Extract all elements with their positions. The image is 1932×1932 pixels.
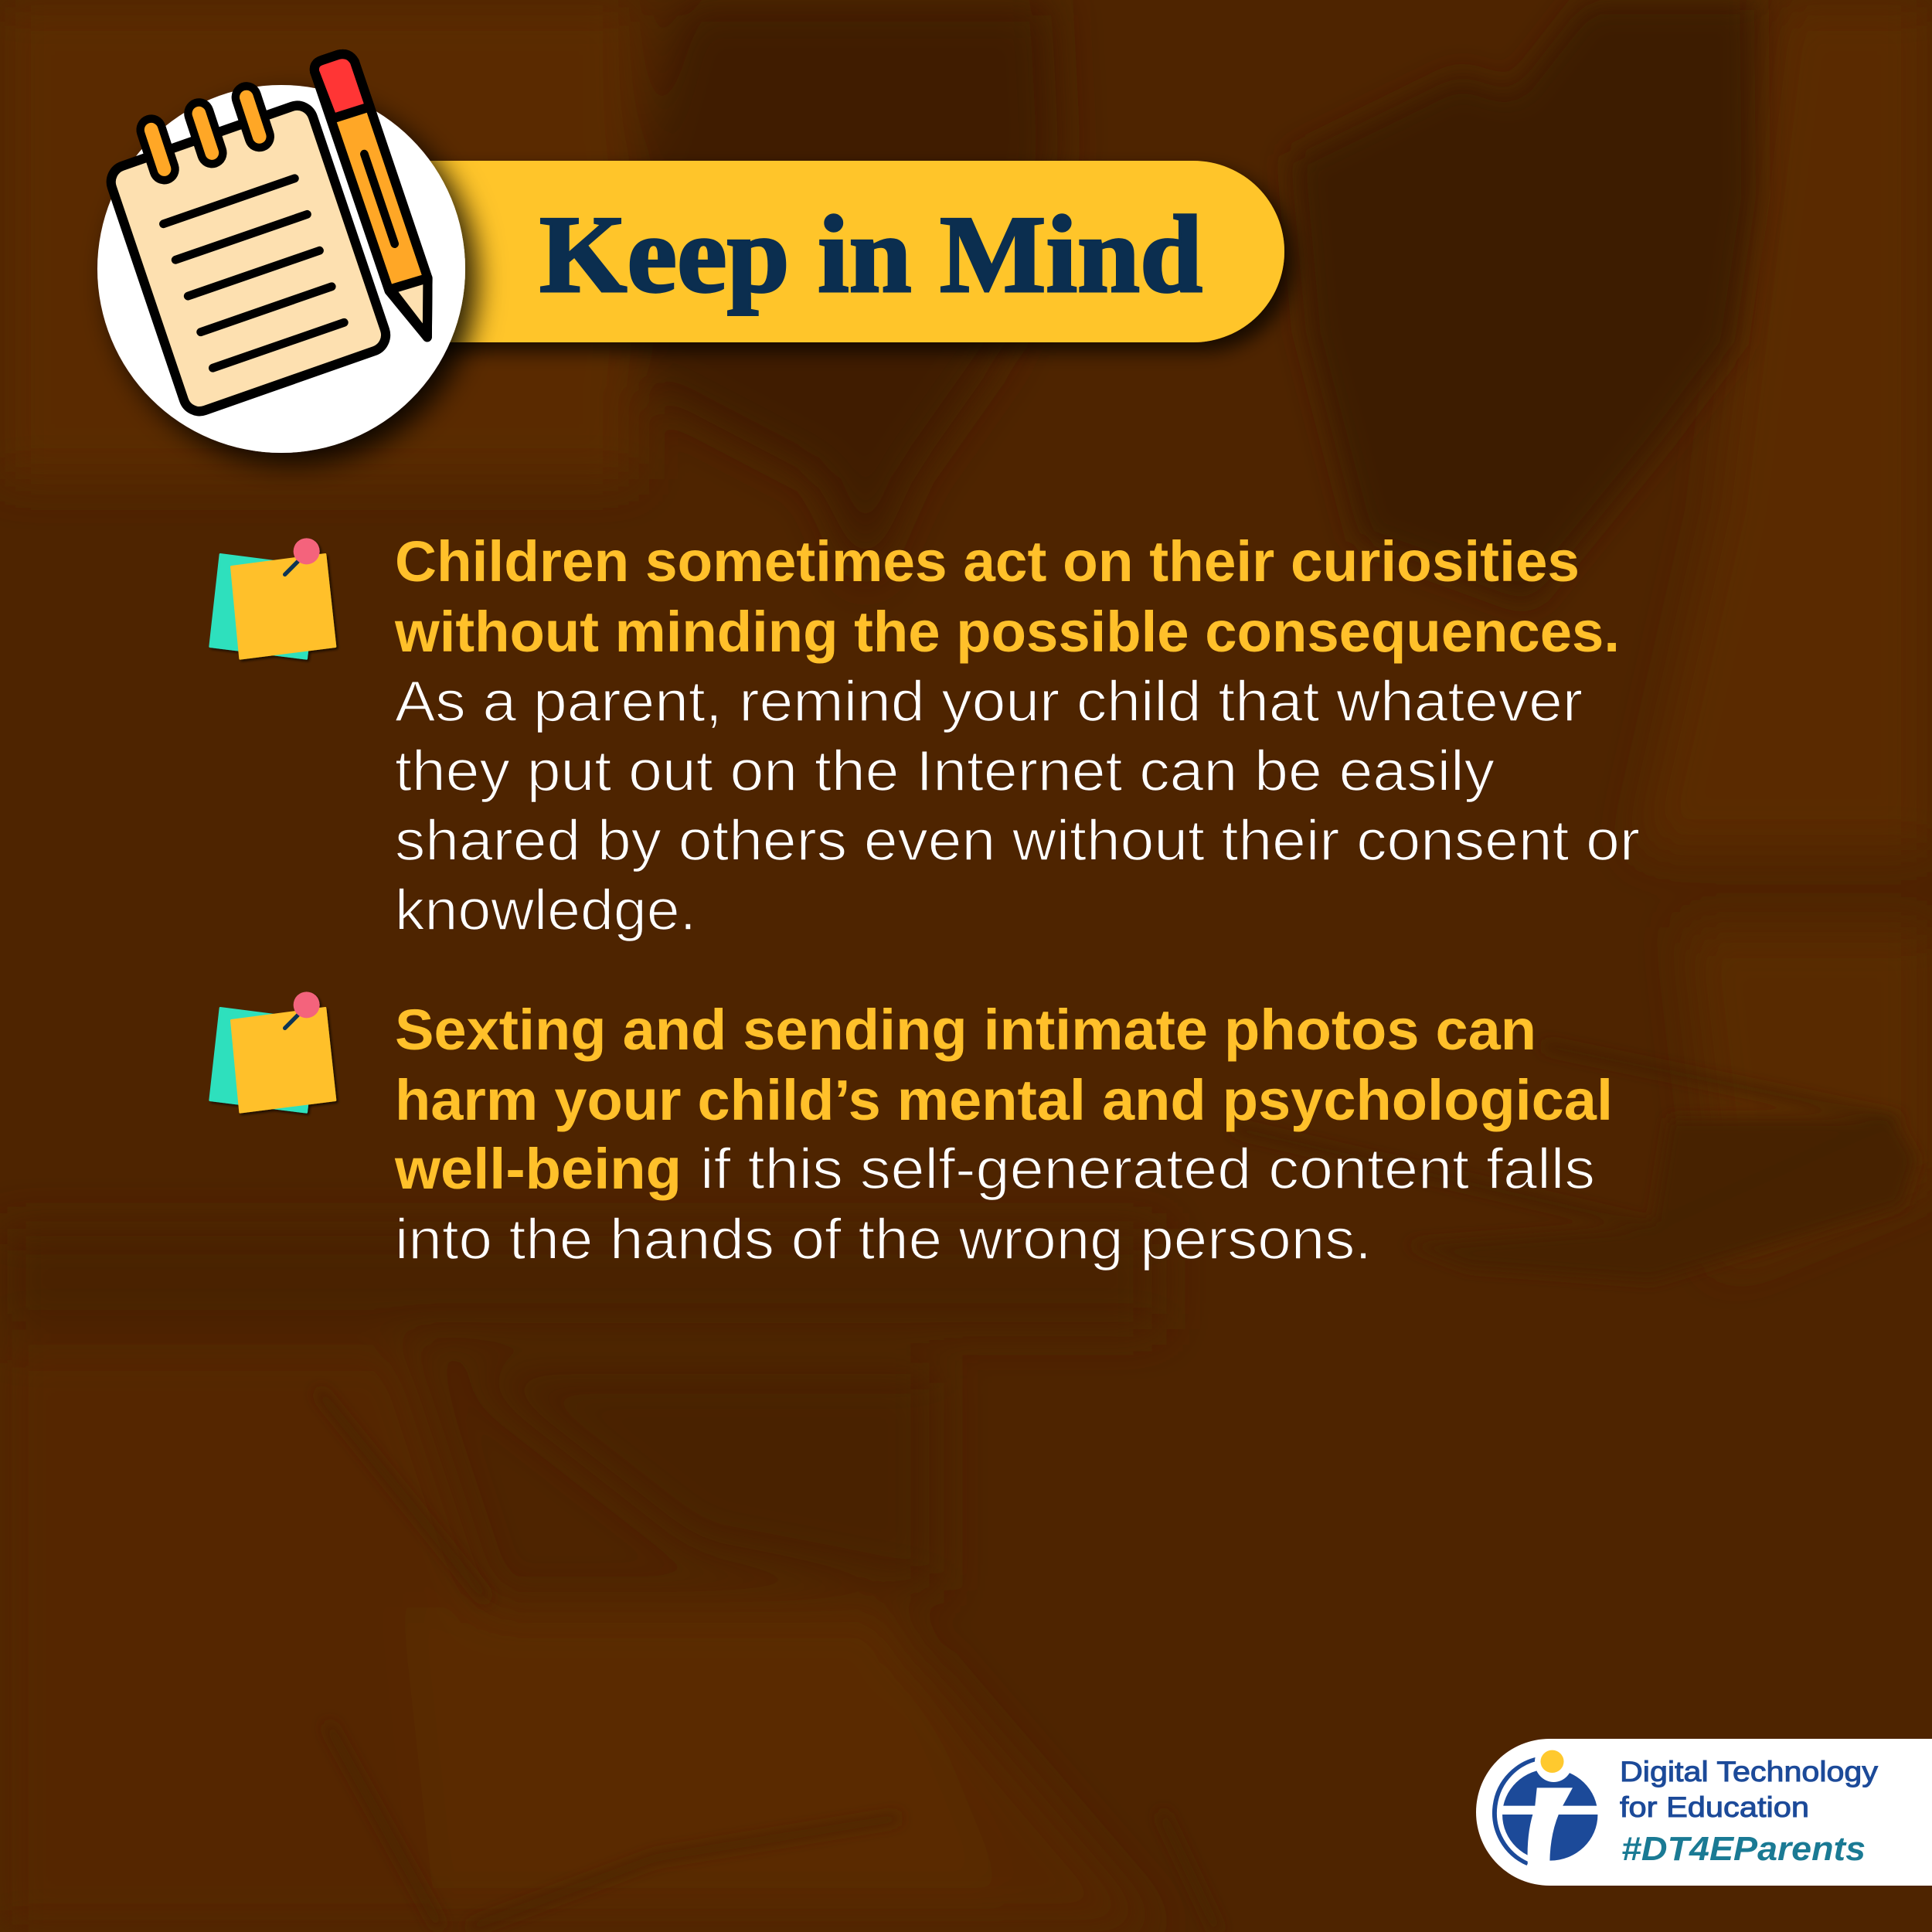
badge: Digital Technology for Education [1476,1739,1932,1886]
title: Keep in Mind [539,193,1202,315]
text block 1: Children sometimes act on their curiosities [395,529,1580,594]
text block 2: harm your child’s mental and psychological [395,1068,1613,1132]
icon: sticky notes 2 [210,992,335,1112]
text block 1: shared by others even without their consent or [395,808,1640,872]
text block 1 [394,529,1640,942]
icon: sticky notes 1 [210,538,335,658]
logo [1495,1742,1603,1865]
badge: Digital Technology for Education: for Education [1620,1791,1809,1823]
icon: pencil [315,54,428,337]
text block 1: without minding the possible consequences. [394,600,1620,664]
badge: Digital Technology for Education: #DT4EParents [1621,1830,1866,1868]
text block 2: Sexting and sending intimate photos can [395,998,1536,1062]
text block 1: knowledge. [395,878,696,942]
badge: Digital Technology for Education: Digital Technology [1620,1756,1879,1787]
text block 2: well-being [394,1137,682,1201]
text block 1: they put out on the Internet can be easily [395,739,1495,803]
text block 2 [394,998,1613,1271]
icon: notepad [107,97,390,416]
icon: notepad and pencil in white circle [97,54,465,453]
text block 2: if this self-generated content falls [700,1137,1595,1201]
text block 2: into the hands of the wrong persons. [395,1207,1372,1271]
banner: Keep in Mind [348,161,1284,342]
text block 1: As a parent, remind your child that whatever [395,669,1583,733]
